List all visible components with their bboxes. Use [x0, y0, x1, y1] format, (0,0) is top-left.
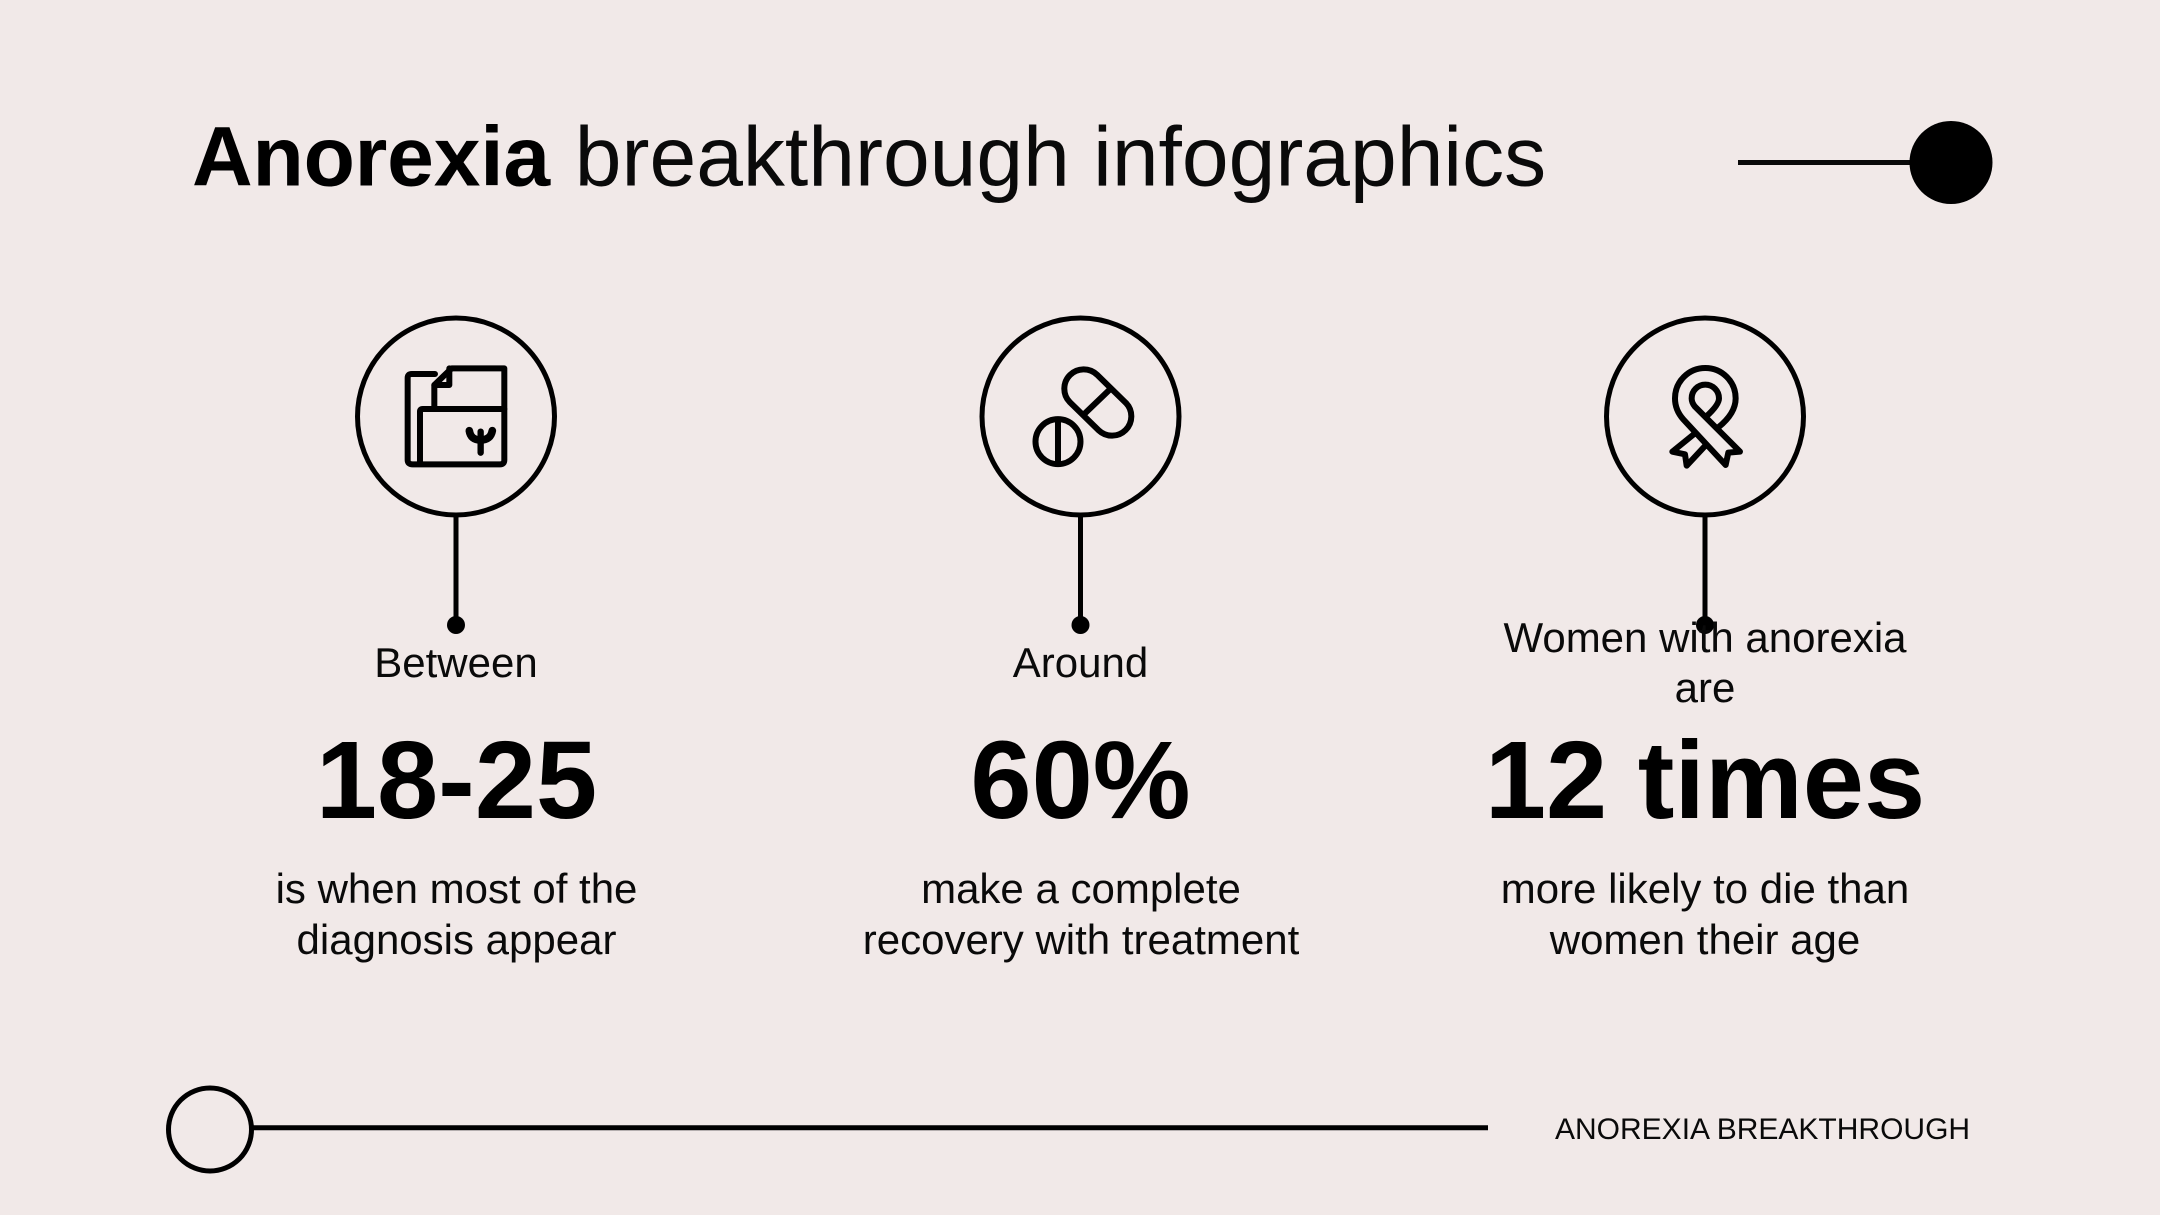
text: mortality description: women their age: [1549, 916, 1860, 963]
text: diagnosis description: diagnosis appear: [297, 916, 616, 963]
icon: pills in circle with connector: [982, 318, 1179, 634]
panel: recovery rate: [863, 318, 1300, 963]
text: recovery description: make a complete: [921, 865, 1241, 912]
text: mortality description: more likely to die than: [1501, 865, 1909, 912]
icon: awareness ribbon in circle with connector: [1606, 318, 1804, 634]
number: 12 times: 12 times: [1485, 719, 1925, 842]
decoration: top line with solid circle: [1738, 121, 1992, 204]
panel: age of diagnosis: [276, 318, 637, 963]
text: diagnosis description: is when most of the: [276, 865, 637, 912]
text: Between: Between: [374, 639, 538, 686]
decoration: bottom line with hollow circle: [168, 1088, 1488, 1171]
text: recovery description: recovery with treatment: [863, 916, 1300, 963]
icon: medical folder in circle with connector: [358, 318, 554, 634]
title: Anorexia breakthrough infographics: [192, 110, 1546, 204]
text: Women with anorexia are: are: [1675, 664, 1735, 711]
footer label: ANOREXIA BREAKTHROUGH: [1555, 1113, 1970, 1146]
number: 18-25: 18-25: [316, 719, 597, 842]
number: 60%: 60%: [970, 719, 1191, 842]
text: Women with anorexia are: Women with anorexia: [1503, 614, 1907, 661]
text: Around: Around: [1013, 639, 1148, 686]
panel: mortality risk: [1485, 318, 1925, 963]
